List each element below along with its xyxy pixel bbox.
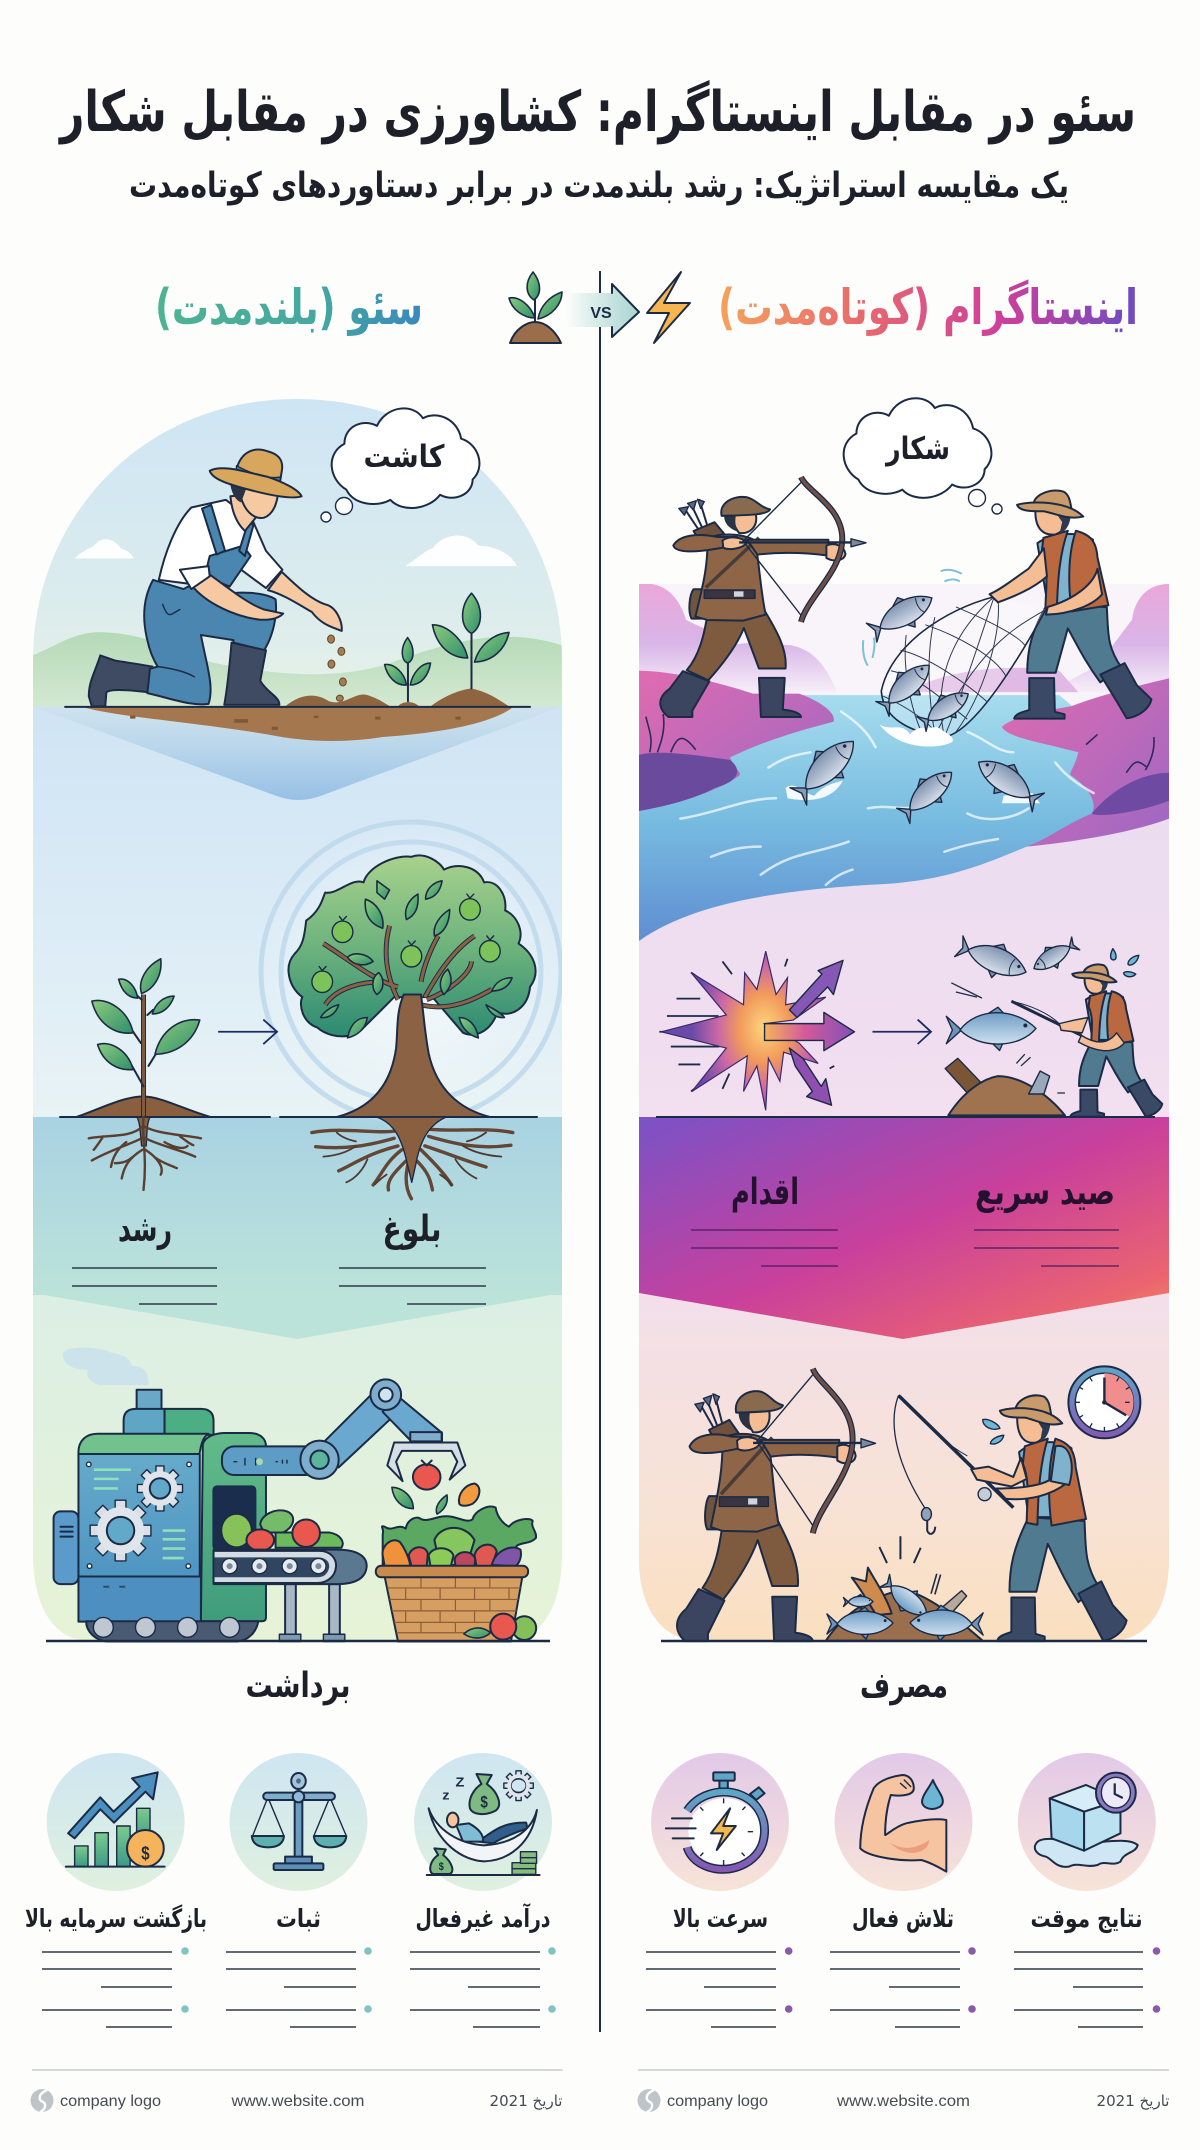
ground line: right bottom xyxy=(661,1640,1147,1642)
benefit: high speed xyxy=(646,1753,792,2027)
thought cloud: hunting: شکار xyxy=(884,431,950,467)
icon: hammock and money: Z xyxy=(456,1776,464,1789)
benefit: temporary results: نتایج موقت xyxy=(1030,1904,1142,1934)
icon: flexed arm xyxy=(860,1775,946,1872)
net and arms xyxy=(786,548,1102,803)
icon: hammock and money: $ xyxy=(439,1861,444,1873)
thought cloud: planting xyxy=(321,408,479,522)
clouds xyxy=(75,535,517,566)
VS arrow: VS xyxy=(590,305,612,322)
fish: jumping in river xyxy=(784,583,1048,827)
column heading: SEO: سئو (بلندمدت) xyxy=(155,279,423,336)
benefit: stability: ثبات xyxy=(276,1904,321,1933)
label: maturity: بلوغ xyxy=(382,1209,442,1250)
arrow: burst to catch xyxy=(872,1020,931,1044)
icon: hammock and money: $ xyxy=(480,1793,488,1812)
roots: tree xyxy=(312,1117,513,1199)
soil strip xyxy=(84,689,513,741)
benefit: high ROI xyxy=(25,1753,207,2027)
benefit: temporary results xyxy=(1014,1753,1160,2027)
conveyor xyxy=(214,1510,367,1642)
footer: left: www.website.com xyxy=(230,2093,364,2110)
icon: lightning xyxy=(647,272,690,343)
footer: right: www.website.com xyxy=(836,2093,970,2110)
thought cloud: hunting xyxy=(844,398,1002,514)
text lines: quick catch xyxy=(974,1230,1119,1266)
footer: right: company logo xyxy=(667,2093,768,2110)
thought cloud: planting: کاشت xyxy=(364,439,445,475)
icon: sprout xyxy=(509,272,562,343)
panel background: Instagram column xyxy=(639,584,1169,1642)
center divider line xyxy=(599,271,601,2032)
benefit: stability xyxy=(226,1753,372,2027)
benefit: passive income xyxy=(410,1753,556,2027)
icon: hammock and money xyxy=(427,1771,540,1875)
icon: hammock and money: z xyxy=(442,1788,450,1802)
arrow: growth xyxy=(218,1020,277,1044)
footer: left: company logo xyxy=(60,2093,161,2110)
text lines: maturity xyxy=(339,1268,486,1304)
panel background: SEO column xyxy=(33,399,569,1642)
illustration: hunter archer top xyxy=(660,477,866,717)
illustration: mature tree xyxy=(289,855,536,1117)
icon: burst with arrows xyxy=(659,951,854,1110)
label: growth: رشد xyxy=(118,1209,172,1250)
ground line: harvest xyxy=(46,1640,550,1642)
ground line: right middle xyxy=(656,1116,1155,1118)
icon: stopwatch xyxy=(666,1772,765,1869)
machine body xyxy=(54,1390,266,1642)
icon: balance scale xyxy=(252,1773,346,1870)
footer: right: تاریخ 2021 xyxy=(1096,2092,1170,2110)
illustration: quick catch xyxy=(945,929,1162,1117)
illustration: hunter archer bottom xyxy=(677,1369,876,1641)
illustration: fisherman with net xyxy=(786,491,1151,803)
footer: left: تاریخ 2021 xyxy=(490,2092,562,2110)
falling produce xyxy=(392,1461,479,1514)
ground line: plant and tree xyxy=(60,1116,537,1118)
label: action: اقدام xyxy=(731,1172,799,1213)
illustration: fish pile xyxy=(826,1536,983,1641)
icon: melting ice xyxy=(1035,1773,1138,1867)
text lines: growth xyxy=(72,1268,217,1304)
benefit: active effort xyxy=(830,1753,976,2027)
small plants xyxy=(385,593,509,701)
label: quick catch: صید سریع xyxy=(975,1172,1115,1213)
icon: company logo xyxy=(638,2089,660,2112)
farmer body xyxy=(89,450,342,706)
benefit: active effort: تلاش فعال xyxy=(852,1904,954,1933)
icon: clock xyxy=(1068,1366,1140,1438)
roots: small plant xyxy=(89,1117,201,1190)
benefit: passive income: درآمد غیرفعال xyxy=(416,1903,551,1934)
text lines: action xyxy=(691,1230,838,1266)
icon: growth chart: $ xyxy=(141,1843,150,1864)
stage label: harvest: برداشت xyxy=(246,1666,350,1706)
VS arrow xyxy=(566,284,639,337)
benefit: high ROI: بازگشت سرمایه بالا xyxy=(25,1904,207,1934)
icon: growth chart xyxy=(66,1772,165,1867)
stage label: consumption: مصرف xyxy=(860,1666,948,1706)
benefit: high speed: سرعت بالا xyxy=(673,1904,768,1934)
seeds xyxy=(328,635,346,701)
icon: company logo xyxy=(30,2089,54,2112)
illustration: growing plant xyxy=(77,959,210,1117)
footer: left xyxy=(30,2070,562,2112)
smoke xyxy=(63,1348,149,1385)
robot arm xyxy=(222,1379,465,1481)
illustration: harvest machine xyxy=(54,1348,536,1642)
illustration: angler with rod xyxy=(894,1395,1127,1641)
footer: right xyxy=(638,2070,1170,2112)
illustration: farmer planting seeds xyxy=(65,450,530,741)
vegetable basket xyxy=(376,1507,536,1642)
